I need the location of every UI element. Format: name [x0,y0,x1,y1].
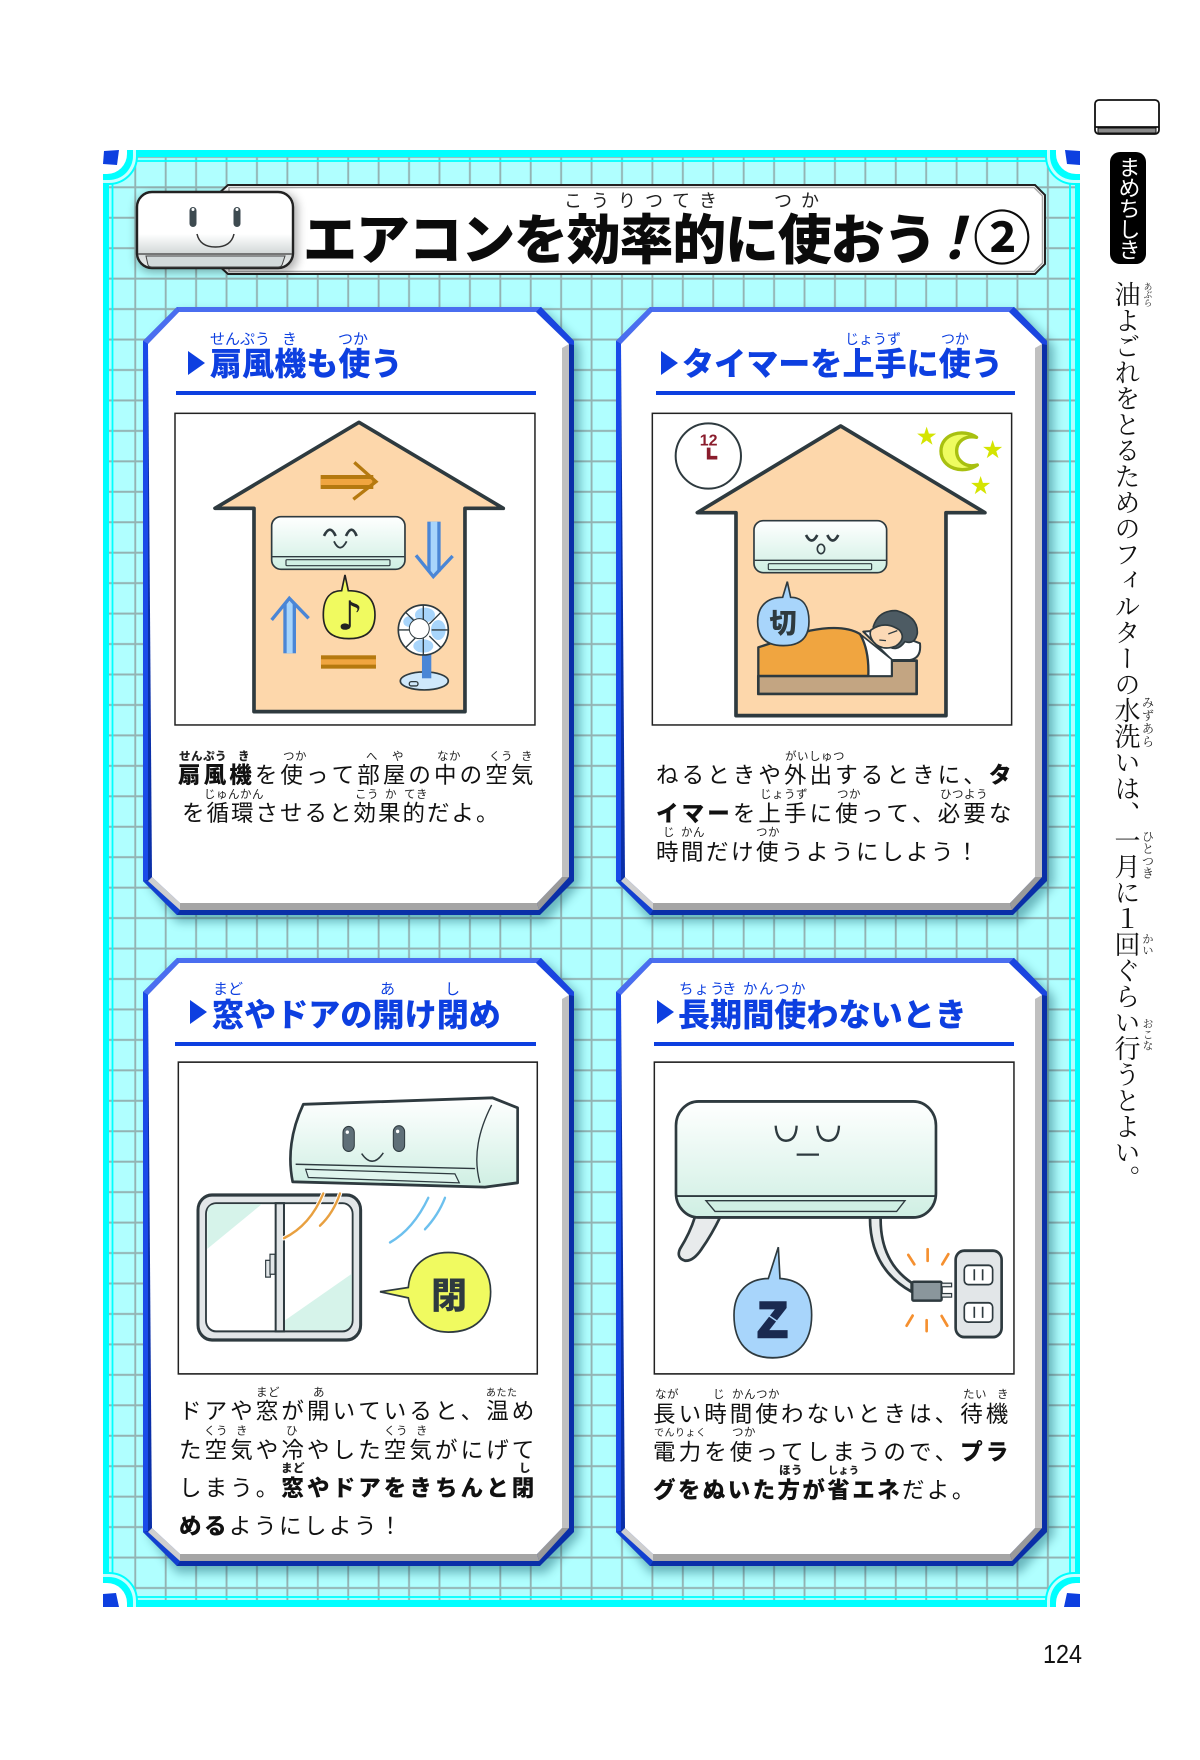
icon: moon and stars [917,427,1002,494]
sidebar tag: まめちしき [1116,156,1140,260]
body text: つか [756,826,780,839]
illustration: unplugged air conditioner [654,1062,1014,1374]
heading: し [445,981,460,998]
body text: じ [713,1388,725,1401]
heading [654,981,1014,1046]
title text: エアコンを効率的に使おう [303,211,936,271]
speech bubble: off [758,582,809,646]
body text: ひ [286,1426,298,1438]
air conditioner [754,521,887,573]
body text: しょう [828,1465,860,1477]
panel: when not in use for a long time [616,958,1054,1573]
body text: ほう [779,1464,803,1477]
speech bubble shape [734,1247,812,1358]
body text: ひつよう [940,788,988,801]
body text [179,1386,537,1539]
sidebar text: かい [1140,933,1156,955]
sidebar text: みずあら [1139,696,1157,748]
body text: せんぷう [179,750,227,763]
body text: 電力を使ってしまうので、プラ [653,1440,1011,1465]
body text: た空気や冷やした空気がにげて [179,1438,537,1463]
speech bubble shape [380,1252,491,1332]
cool air lines [390,1198,445,1242]
body text: たい [963,1388,987,1401]
sidebar text: 油よごれをとるためのフィルターの水洗いは、一月に１回ぐらい行うとよい。 [1109,281,1146,1191]
panel: use the timer [616,307,1054,922]
body text: 時間だけ使うようにしよう！ [656,840,981,865]
heading: まど [213,981,243,998]
heading: タイマーを上手に使う [682,346,1003,382]
icon: clock: 12 [700,432,718,449]
speech bubble: music note [323,575,375,639]
card shadow [622,963,1054,1573]
title banner [217,185,1045,274]
pipe [679,1217,720,1261]
body text: なが [655,1387,679,1401]
heading: 長期間使わないとき [678,997,967,1033]
body text: じ [663,826,675,839]
heading: かんつか [743,981,807,998]
card shadow [149,312,580,922]
heading: 扇風機も使う [210,346,403,382]
body text: かんつか [732,1388,780,1401]
body text: や [392,750,404,763]
body text: き [997,1388,1009,1401]
speech bubble: off: 切 [769,607,797,638]
body text: つか [837,788,861,801]
body text [178,750,536,826]
blue down arrow [416,522,453,577]
title number: ② [973,207,1031,272]
orange bar [321,655,376,669]
body text: き [416,1424,428,1438]
icon: clock [676,423,741,489]
sidebar tag [1110,152,1146,264]
sidebar text: ひとつき [1139,830,1157,879]
title exclamation: ！ [925,207,981,272]
air conditioner [272,517,405,569]
heading: じょう [845,331,887,347]
body text: き [521,750,533,763]
illustration: window and air conditioner [178,1062,537,1374]
body text: こう [355,788,379,801]
card body [616,958,1047,1566]
page number: 124 [1043,1639,1082,1669]
heading: 窓やドアの開け閉め [212,997,501,1033]
warm air lines [284,1194,340,1238]
title furigana: つか [774,191,828,211]
body text: ねるときや外出するときに、タ [656,763,1014,788]
body text: かん [681,826,705,839]
body text: がいしゅつ [785,749,845,763]
power cord [870,1217,912,1292]
heading: つか [338,331,368,348]
plug [912,1282,952,1301]
body text: あ [313,1386,325,1399]
heading [175,981,536,1046]
blue up arrow [272,598,309,653]
body text [653,1387,1011,1503]
card body [143,307,574,915]
body text: めるようにしよう！ [179,1514,404,1539]
body text: なか [437,750,461,763]
air conditioner [290,1098,518,1187]
card shadow [622,312,1054,922]
panel: main grid frame [103,150,1080,1607]
sparks [907,1249,948,1331]
body text: き [236,1424,248,1438]
sidebar text: おこな [1140,1018,1156,1050]
sidebar text: あぶら [1142,282,1154,308]
body text: き [238,750,250,763]
air conditioner [676,1101,936,1217]
body text: つか [283,750,307,763]
speech bubble text: 閉 [431,1275,467,1316]
card body [616,307,1047,915]
body text: しまう。窓やドアをきちんと閉 [179,1476,537,1501]
body text: を循環させると効果的だよ。 [182,801,501,826]
panel: open and close windows and doors [143,958,580,1573]
icon: air conditioner mascot [137,192,297,272]
panel: use a fan [143,307,580,922]
heading: き [722,981,736,998]
outlet [956,1251,1002,1337]
body text: 長い時間使わないときは、待機 [653,1402,1011,1427]
body text: つか [732,1426,756,1439]
card shadow [149,963,580,1573]
body text: し [519,1462,531,1475]
body text: あたた [486,1387,518,1399]
orange arrow [321,462,376,499]
body text: くう [204,1424,228,1438]
heading: つか [941,331,969,347]
heading: せんぷう [210,331,270,348]
body text: ドアや窓が開いていると、温め [179,1399,537,1424]
card body [143,958,574,1566]
speech bubble: music note: ♪ [337,593,363,639]
body text: グをぬいた方が省エネだよ。 [653,1477,977,1503]
body text: じゅんかん [204,788,264,801]
icon: sidebar air conditioner [1095,100,1159,134]
body text: まど [281,1461,305,1475]
window [198,1195,361,1340]
body text: イマーを上手に使って、必要な [656,802,1014,826]
heading: き [282,331,297,348]
heading: あ [380,981,395,998]
title furigana: こうりつてき [564,191,726,211]
body text: へ [366,751,378,763]
speech bubble text: Z [757,1292,788,1348]
icon: electric fan [398,605,448,690]
body text: か [385,788,397,801]
heading [176,331,536,395]
body text: てき [404,788,428,801]
body text: まど [256,1386,280,1399]
body text: 扇風機を使って部屋の中の空気 [178,763,536,788]
illustration: fan circulation house [175,413,535,725]
illustration: sleeping with timer [652,413,1012,725]
body text: くう [384,1424,408,1438]
body text: くう [489,750,513,763]
heading [656,331,1015,395]
heading: ず [887,331,901,347]
body text: でんりょく [654,1427,706,1439]
body text: じょうず [760,788,808,801]
bed and sleeping person [758,611,920,694]
heading: ちょう [679,981,726,998]
body text [656,749,1014,865]
z strike line [762,1311,784,1326]
